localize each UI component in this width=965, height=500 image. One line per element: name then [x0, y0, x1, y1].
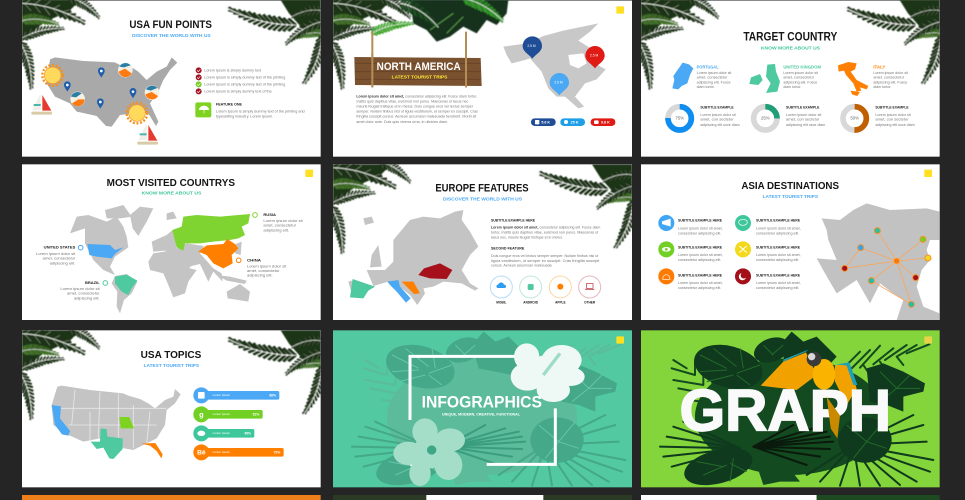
text: United Kingdom: adipiscing elit. Fusce	[783, 80, 818, 84]
icon: other: OTHER	[584, 300, 596, 304]
paragraph	[356, 95, 478, 124]
text: subtitle example 3	[875, 106, 915, 127]
checklist	[196, 67, 286, 94]
callout: Russia: RUSIA	[263, 213, 277, 217]
title: EUROPE FEATURES	[435, 183, 529, 195]
text: subtitle example 1	[700, 106, 740, 127]
item: speech: consectetur adipiscing elit.	[756, 231, 799, 235]
checklist: Lorem Ipsum is simply dummy text of the printing	[204, 75, 286, 79]
text: subtitle example 2: SUBTITLE EXAMPLE	[786, 106, 819, 110]
panel: Europe Features	[319, 157, 639, 320]
icon: location pins	[64, 67, 136, 109]
country: China	[198, 239, 238, 268]
text: subtitle example 3: amet, con sectetur	[875, 118, 909, 122]
text: United Kingdom	[783, 64, 821, 89]
subtitle: UNIQUE, MODERN, CREATIVE, FUNCTIONAL	[442, 413, 520, 417]
state: Texas	[91, 429, 123, 459]
panel: Target Country	[627, 0, 946, 157]
tropical leaves	[370, 0, 509, 44]
text: second feature: cursus. Aenean accumsan malesuada	[491, 264, 552, 268]
callout: United States	[36, 245, 83, 265]
country: Russia	[172, 214, 250, 251]
text: Portugal: amet, consectetur	[697, 76, 727, 80]
callout: Brazil	[60, 281, 108, 300]
bar: 52%: Lorem Ipsum	[213, 412, 231, 416]
item: megaphone: Lorem ipsum dolor sit amet,	[678, 226, 723, 230]
callout: United States: amet, consectetur	[43, 257, 75, 261]
title: USA FUN POINTS	[129, 19, 212, 31]
country: Brazil	[115, 275, 137, 295]
world map	[70, 205, 250, 313]
item: moon	[735, 268, 801, 290]
text: Italy: Lorem ipsum dolor sit	[873, 71, 908, 75]
donut: 25%	[754, 107, 777, 130]
page marker	[616, 336, 624, 344]
page marker	[616, 6, 624, 14]
bar: 66%: Lorem Ipsum	[213, 393, 231, 397]
icon: apple	[549, 276, 571, 304]
item: megaphone	[658, 215, 723, 235]
panel: USA Topics	[8, 323, 327, 500]
paragraph: semper. Nullam finibus nisl ut ligula vestibulum, ut semper ex suscipit. Cras	[356, 110, 478, 114]
palm corner right	[226, 0, 327, 87]
item: speech: Lorem ipsum dolor sit amet,	[756, 226, 801, 230]
panel: Most Visited Countrys	[22, 164, 321, 320]
item: bell	[658, 268, 723, 290]
item: scissors	[735, 241, 801, 262]
donut: 50%	[843, 107, 866, 130]
wooden sign	[354, 53, 482, 87]
palm corner right	[845, 0, 946, 87]
bar: 45%: 45%	[244, 432, 251, 436]
item: megaphone: SUBTITLE EXAMPLE HERE	[678, 219, 722, 223]
map pin: red: 2.5 M	[590, 54, 599, 58]
donut: 25%: 25%	[761, 116, 770, 121]
social pills: 5.6 K	[541, 121, 550, 125]
palm corner right	[226, 330, 327, 418]
map: Europe	[348, 210, 478, 305]
route network	[842, 228, 931, 307]
country: Ukraine	[418, 263, 452, 279]
map: North America	[503, 23, 606, 108]
feature one: Lorem Ipsum is simply dummy text of the printing and	[216, 109, 305, 113]
text: second feature: ligula vestibulum, ut semper ex suscipit. Cras fringilla suscipit	[491, 259, 599, 263]
subtitle: LATEST TOURIST TRIPS	[144, 363, 199, 368]
palm corner left	[319, 157, 416, 256]
text: subtitle example 2: Lorem ipsum dolor sit	[786, 113, 821, 117]
callout: Brazil: BRAZIL	[85, 281, 100, 285]
checklist: Lorem Ipsum is simply dummy text	[204, 68, 261, 72]
item: scissors: consectetur adipiscing elit.	[756, 258, 799, 262]
callout: China	[236, 258, 286, 278]
country: Spain	[350, 279, 375, 298]
state: Florida	[141, 443, 163, 458]
item: bell: Lorem ipsum dolor sit amet,	[678, 281, 723, 285]
map pin: red	[585, 46, 605, 68]
slide strip: palm	[333, 495, 632, 500]
wooden sign: LATEST TOURIST TRIPS	[392, 75, 447, 80]
item: moon: consectetur adipiscing elit.	[756, 286, 799, 290]
social pills: 9.8 K	[601, 121, 610, 125]
palm corner left	[8, 0, 105, 91]
item: bell: consectetur adipiscing elit.	[678, 286, 721, 290]
feature one: FEATURE ONE	[216, 103, 242, 107]
slide strip: foliage	[641, 495, 940, 500]
map pin: light blue	[550, 73, 569, 95]
icon: sun 2	[127, 103, 147, 123]
map: Asia	[817, 203, 940, 320]
bar: 52%	[193, 406, 263, 422]
title: USA TOPICS	[141, 350, 202, 361]
bar: 52%: 52%	[253, 413, 259, 417]
bar: 45%: Lorem Ipsum	[213, 431, 231, 435]
icon: sailboat right	[137, 123, 158, 145]
map pin: light blue: 2.5 M	[554, 80, 563, 84]
item: scissors: SUBTITLE EXAMPLE HERE	[756, 245, 800, 249]
palm corner right	[537, 164, 639, 252]
checklist: Lorem Ipsum is simply dummy text of the	[204, 89, 272, 93]
donut: 75%	[668, 107, 691, 130]
bar: 70%: Lorem Ipsum	[213, 450, 231, 454]
item: eye: Lorem ipsum dolor sit amet,	[678, 253, 723, 257]
bar: 70%: 70%	[274, 451, 280, 455]
foliage	[660, 332, 933, 492]
icon: beach balls	[70, 63, 159, 106]
state: Missouri	[119, 417, 134, 428]
title: ASIA DESTINATIONS	[741, 181, 839, 192]
icon: android	[520, 276, 542, 304]
hibiscus flower white	[511, 343, 585, 402]
text: subtitle example 3: adipiscing elit usce diam	[875, 123, 915, 127]
subtitle: KNOW MORE ABOUT US	[761, 46, 820, 51]
text: Portugal: adipiscing elit. Fusce	[697, 80, 731, 84]
map: USA	[52, 386, 181, 450]
title: GRAPH	[680, 379, 891, 444]
bar: 52%: g	[199, 410, 204, 419]
panel: Asia Destinations	[641, 164, 940, 320]
text: subtitle example 1: SUBTITLE EXAMPLE	[700, 106, 734, 110]
panel: Infographics	[333, 330, 632, 500]
country: Balkans	[402, 282, 420, 294]
text: second feature	[491, 247, 599, 268]
icon: android: ANDROID	[523, 300, 539, 304]
foliage	[352, 332, 625, 492]
icon: sun	[42, 65, 63, 86]
text: subtitle example 3: SUBTITLE EXAMPLE	[875, 106, 909, 110]
text: subtitle example: lacus nec, mauris feugiat tristique et in metus.	[491, 235, 563, 239]
subtitle: DISCOVER THE WORLD WITH US	[132, 33, 211, 38]
callout: Russia: Lorem ipsum dolor sit	[263, 219, 303, 223]
feature one	[195, 102, 305, 118]
icon: mobil: MOBIL	[496, 300, 506, 304]
text: United Kingdom: Lorem ipsum dolor sit	[783, 71, 818, 75]
text: subtitle example 1: adipiscing elit usce diam	[700, 123, 740, 127]
country: USA	[87, 244, 123, 258]
paragraph: mauris feugiat tristique et in metus. Duis congue eros vel lectus semper	[356, 105, 473, 109]
parrot tail	[827, 397, 840, 438]
text: second feature: SECOND FEATURE	[491, 247, 524, 251]
callout: United States: UNITED STATES	[44, 246, 75, 250]
text: subtitle example 2: amet, con sectetur	[786, 118, 819, 122]
bar: 66%	[193, 387, 279, 403]
item: speech: SUBTITLE EXAMPLE HERE	[756, 219, 800, 223]
bar: 45%	[193, 425, 254, 441]
callout: Russia	[253, 213, 303, 232]
item: speech	[735, 215, 801, 235]
page marker	[924, 170, 932, 177]
text: subtitle example 1: amet, con sectetur	[700, 118, 734, 122]
text: United Kingdom: UNITED KINGDOM	[783, 64, 821, 69]
paragraph: amet dolor ante. Duis quis viverra urna, in ultricies diam.	[356, 120, 448, 124]
hibiscus flower teal	[393, 418, 465, 486]
text: Italy	[873, 64, 908, 89]
text: subtitle example: tortor, mattis quis dapibus vitae, euismod non purus. Maecenas ut	[491, 230, 598, 234]
palm corner left	[319, 0, 416, 91]
callout: Brazil: Lorem ipsum dolor sit	[60, 287, 100, 291]
callout: China: CHINA	[247, 258, 262, 262]
hanging ropes	[372, 32, 466, 87]
checklist: Lorem Ipsum is simply dummy text of the printing	[204, 82, 286, 86]
callout: China: adipiscing elit.	[247, 274, 273, 278]
donut: 50%: 50%	[850, 116, 859, 121]
panel: USA Fun Points	[8, 0, 327, 157]
callout: Russia: adipiscing elit.	[263, 228, 289, 232]
title: MOST VISITED COUNTRYS	[107, 178, 235, 189]
palm corner left	[8, 323, 105, 422]
text: Italy: amet, consectetur	[873, 76, 904, 80]
map pin: blue dark	[523, 36, 542, 59]
text: Italy: diam tortor.	[873, 85, 891, 89]
text: Portugal	[697, 64, 731, 89]
map: Italy	[838, 62, 868, 96]
icon: other	[579, 276, 601, 304]
icon: mobil	[490, 276, 512, 304]
paragraph: fringilla suscipit cursus. Aenean accumsan malesuada hendrerit. Morbi sit	[356, 115, 476, 119]
subtitle: KNOW MORE ABOUT US	[142, 191, 201, 196]
subtitle: DISCOVER THE WORLD WITH US	[443, 196, 522, 201]
map pin: blue dark: 2.5 M	[527, 44, 536, 48]
callout: Brazil: adipiscing elit.	[74, 296, 100, 300]
title: INFOGRAPHICS	[422, 393, 542, 412]
white frame	[410, 356, 555, 464]
item: eye: consectetur adipiscing elit.	[678, 258, 721, 262]
feature one: typesetting industry. Lorem Ipsum.	[216, 114, 273, 118]
text: subtitle example 1: Lorem ipsum dolor sit	[700, 113, 736, 117]
icon: sailboat left	[31, 93, 52, 115]
callout: China: Lorem ipsum dolor sit	[247, 264, 286, 268]
text: subtitle example 2: adipiscing elit usce diam	[786, 123, 826, 127]
item: eye	[658, 241, 723, 262]
text: second feature: Duis congue eros vel lectus semper semper. Nullam finibus nisl ut	[491, 254, 598, 258]
bar: 70%: Bē	[197, 450, 206, 457]
state lines	[53, 390, 167, 448]
text: subtitle example 2	[786, 106, 826, 127]
text: Italy: ITALY	[873, 64, 885, 69]
donut: 75%: 75%	[675, 116, 684, 121]
text: Portugal: Lorem ipsum dolor sit	[697, 71, 731, 75]
text: subtitle example	[491, 218, 601, 239]
text: subtitle example 3: Lorem ipsum dolor sit	[875, 113, 911, 117]
item: eye: SUBTITLE EXAMPLE HERE	[678, 245, 722, 249]
text: subtitle example: SUBTITLE EXAMPLE HERE	[491, 218, 535, 222]
title: TARGET COUNTRY	[743, 30, 837, 44]
text: United Kingdom: amet, consectetur	[783, 76, 814, 80]
social pills: 25 K	[571, 121, 579, 125]
slide strip: orange	[22, 495, 321, 500]
text: subtitle example: Lorem ipsum dolor sit amet, consectetur adipiscing elit. Fusce diam	[491, 226, 601, 230]
item: scissors: Lorem ipsum dolor sit amet,	[756, 253, 801, 257]
subtitle: LATEST TOURIST TRIPS	[763, 194, 818, 199]
item: bell: SUBTITLE EXAMPLE HERE	[678, 273, 722, 277]
callout: United States: Lorem ipsum dolor sit	[36, 252, 75, 256]
page marker	[924, 336, 932, 344]
bar: 66%: 66%	[269, 394, 276, 398]
text: Italy: adipiscing elit. Fusce	[873, 80, 908, 84]
map: Portugal	[672, 63, 693, 89]
panel: Graph	[641, 330, 940, 500]
wooden sign: NORTH AMERICA	[377, 61, 461, 73]
item: megaphone: consectetur adipiscing elit.	[678, 231, 721, 235]
social pills	[531, 118, 615, 126]
country: Italy	[387, 280, 411, 303]
paragraph: Lorem ipsum dolor sit amet, consectetur adipiscing elit. Fusce diam tortor,	[356, 95, 477, 99]
callout: Brazil: amet, consectetur	[67, 292, 100, 296]
text: Portugal: diam tortor.	[697, 85, 715, 89]
paragraph: mattis quis dapibus vitae, euismod non purus. Maecenas ut lacus nec	[356, 100, 469, 104]
callout: United States: adipiscing elit.	[50, 261, 75, 265]
item: moon: Lorem ipsum dolor sit amet,	[756, 281, 801, 285]
panel: North America	[319, 0, 632, 157]
palm corner left	[627, 0, 724, 91]
parrot wings and body	[761, 350, 857, 405]
map: United Kingdom	[749, 64, 780, 93]
USA map	[47, 57, 177, 127]
state: California	[52, 405, 70, 436]
page marker	[305, 170, 313, 177]
text: United Kingdom: diam tortor.	[783, 85, 801, 89]
bar: 70%	[193, 444, 284, 460]
callout: China: amet, consectetur	[247, 269, 280, 273]
text: Portugal: PORTUGAL	[697, 64, 719, 69]
callout: Russia: amet, consectetur	[263, 224, 296, 228]
icon: apple: APPLE	[555, 300, 566, 304]
item: moon: SUBTITLE EXAMPLE HERE	[756, 273, 800, 277]
